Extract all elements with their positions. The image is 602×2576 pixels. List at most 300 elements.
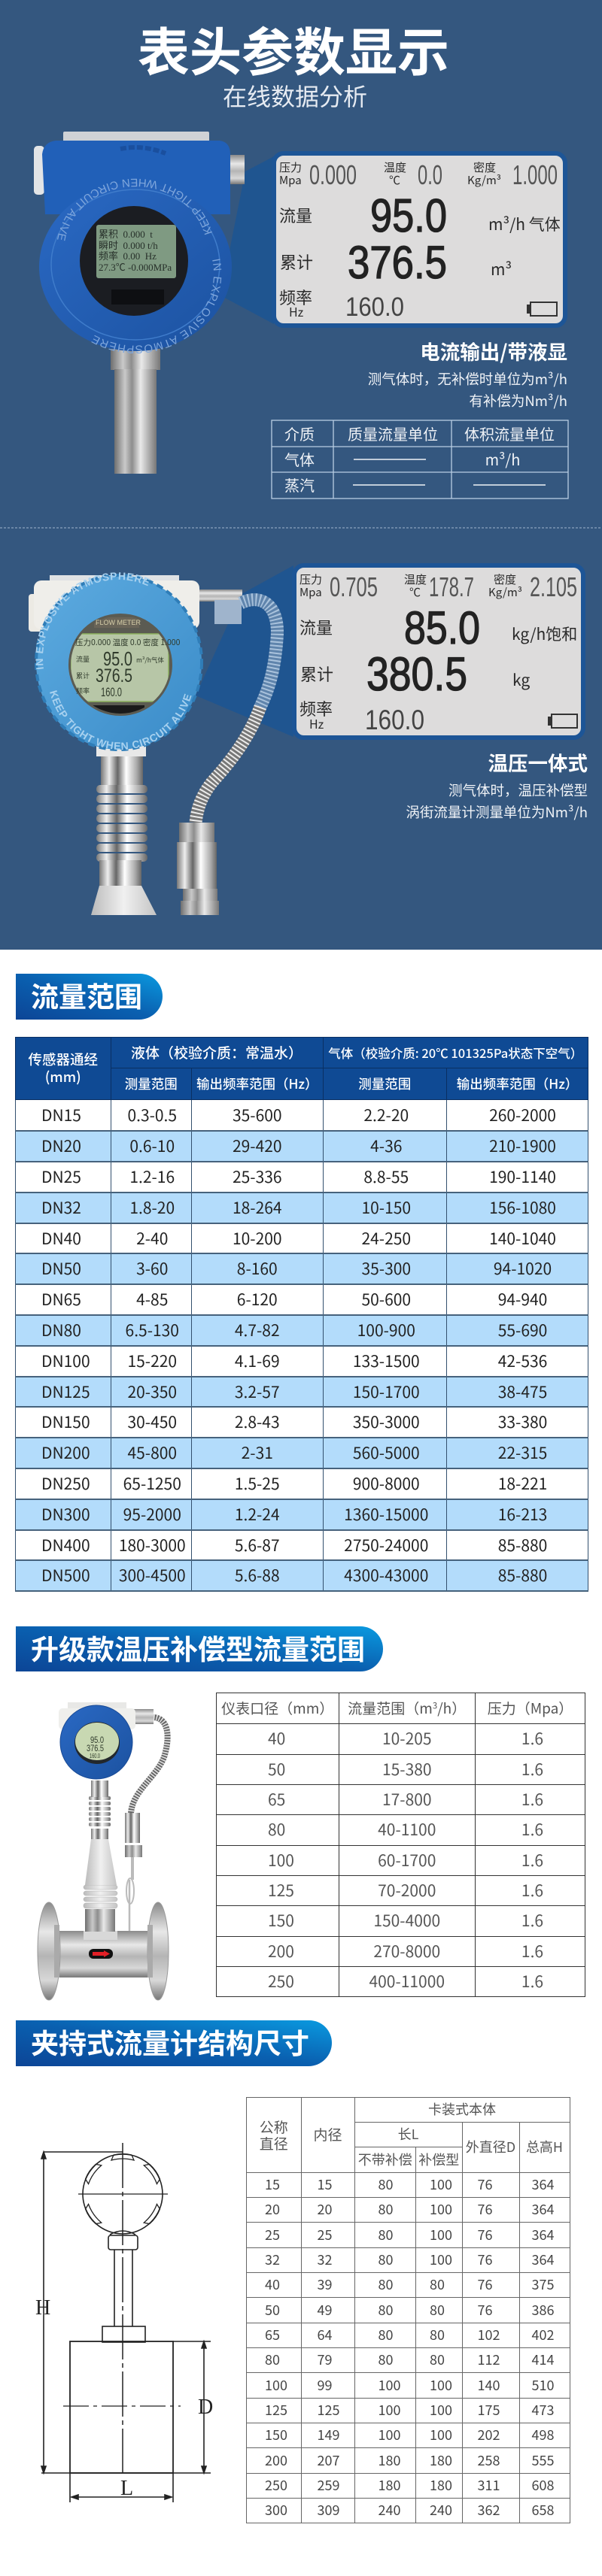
unit table on dark panel: 质量流量单位	[348, 423, 438, 444]
table: clamp-type structure dimensions: 100	[430, 2174, 452, 2194]
table: flow range: 24-250	[361, 1227, 411, 1250]
table: upgraded compensated flow range: 1.6	[521, 1758, 543, 1780]
table: clamp-type structure dimensions: 100	[430, 2225, 452, 2244]
table: clamp-type structure dimensions: 364	[531, 2225, 554, 2244]
table: flow range: 65-1250	[123, 1472, 181, 1495]
table: flow range: 35-300	[361, 1257, 411, 1280]
table: upgraded compensated flow range: 200	[268, 1940, 294, 1962]
table: clamp-type structure dimensions: 100	[430, 2425, 452, 2444]
table: flow range: 94-1020	[494, 1257, 552, 1280]
table: flow range: 2-31	[242, 1441, 273, 1464]
table: clamp-type structure dimensions: 39	[318, 2274, 332, 2294]
table: clamp-type structure dimensions: 80	[430, 2300, 445, 2320]
meter head outline	[83, 2153, 163, 2342]
dimension H: H	[35, 2296, 50, 2320]
unit table on dark panel: 蒸汽	[284, 474, 315, 496]
dimension D: D	[198, 2396, 213, 2419]
table: clamp-type structure dimensions: 49	[318, 2300, 332, 2320]
LCD display 2: 温度	[404, 571, 427, 587]
table: flow range: 85-880	[498, 1534, 547, 1556]
table: flow range: 260-2000	[489, 1104, 556, 1126]
table: clamp-type structure dimensions: 414	[531, 2350, 554, 2369]
table: clamp-type structure dimensions: 32	[318, 2250, 332, 2269]
table: upgraded compensated flow range: 60-1700	[378, 1849, 436, 1871]
illustration: blue transmitter with current output	[34, 132, 245, 474]
LCD display 1: Hz	[289, 302, 304, 320]
subtitle: 在线数据分析	[223, 78, 367, 113]
table: clamp-type structure dimensions: 100	[430, 2199, 452, 2219]
heading: clamp-type structure dimensions: 夹持式流量计结构尺寸	[31, 2021, 309, 2062]
table: upgraded compensated flow range	[216, 1693, 585, 1997]
LCD display 2: 频率	[299, 696, 333, 720]
table: upgraded compensated flow range: 400-11000	[369, 1970, 445, 1993]
table: flow range: 50-600	[361, 1288, 411, 1311]
table: flow range: 350-3000	[353, 1411, 420, 1433]
table: clamp-type structure dimensions: 200	[265, 2450, 287, 2470]
table: flow range: 4300-43000	[344, 1564, 428, 1587]
LCD display 2: kg	[512, 668, 530, 691]
caption: current output with LCD: 电流输出/带液显	[420, 336, 567, 365]
table: flow range: 85-880	[498, 1564, 547, 1587]
table: clamp-type structure dimensions: 50	[265, 2300, 280, 2320]
table: clamp-type structure dimensions: 125	[318, 2400, 339, 2420]
table: clamp-type structure dimensions: 100	[378, 2375, 400, 2395]
table: flow range: 液体（校验介质：常温水）	[131, 1042, 303, 1062]
table: flow range: 45-800	[127, 1441, 177, 1464]
table: flow range: (mm)	[45, 1067, 81, 1086]
table: flow range: 140-1040	[489, 1227, 556, 1250]
table: upgraded compensated flow range: 250	[268, 1970, 294, 1993]
LCD display 1: 0.000	[309, 159, 357, 190]
table: clamp-type structure dimensions: 259	[318, 2475, 339, 2495]
table: flow range: 210-1900	[489, 1135, 556, 1157]
table: flow range: 1.8-20	[129, 1196, 175, 1219]
table: flow range: 1.2-16	[129, 1165, 175, 1188]
table: flow range: 560-5000	[353, 1441, 420, 1464]
table: flow range: 95-2000	[123, 1503, 181, 1526]
table: clamp-type structure dimensions: 100	[430, 2250, 452, 2269]
LCD display 1: 376.5	[348, 237, 447, 288]
table: clamp-type structure dimensions: 内径	[313, 2124, 342, 2144]
table: flow range: 55-690	[498, 1319, 547, 1341]
dimension H	[35, 2152, 211, 2473]
table: clamp-type structure dimensions: 100	[430, 2400, 452, 2420]
table: flow range: 2.8-43	[235, 1411, 280, 1433]
table: clamp-type structure dimensions: 258	[477, 2450, 500, 2470]
table: clamp-type structure dimensions: 公称	[260, 2117, 288, 2137]
table: upgraded compensated flow range: 70-2000	[378, 1879, 436, 1902]
LCD display 1: 1.000	[512, 159, 558, 190]
table: flow range: 156-1080	[489, 1196, 556, 1219]
table: clamp-type structure dimensions: 100	[378, 2425, 400, 2444]
table: clamp-type structure dimensions: 311	[477, 2475, 500, 2495]
table: clamp-type structure dimensions: 180	[430, 2475, 452, 2495]
table: clamp-type structure dimensions: 149	[318, 2425, 339, 2444]
table: upgraded compensated flow range: 1.6	[521, 1788, 543, 1811]
table: flow range: 35-600	[233, 1104, 282, 1126]
table: flow range: 94-940	[498, 1288, 547, 1311]
title: 表头参数显示	[138, 11, 449, 86]
table: clamp-type structure dimensions: 80	[378, 2300, 393, 2320]
illustration: flanged vortex flowmeter	[38, 1702, 169, 2000]
table: flow range: DN200	[41, 1441, 90, 1464]
table: flow range: 900-8000	[353, 1472, 420, 1495]
table: flow range: 38-475	[498, 1380, 547, 1403]
table: flow range: DN20	[41, 1135, 81, 1157]
table: flow range: 4.1-69	[235, 1350, 280, 1372]
table: clamp-type structure dimensions: 100	[265, 2375, 287, 2395]
table: clamp-type structure dimensions: 102	[477, 2325, 500, 2344]
table: clamp-type structure dimensions: 240	[430, 2500, 452, 2520]
table: clamp-type structure dimensions: 76	[477, 2250, 492, 2269]
table: flow range: DN150	[41, 1411, 90, 1433]
illustration: flanged vortex flowmeter: 376.5	[87, 1743, 104, 1753]
table: clamp-type structure dimensions	[246, 2097, 570, 2523]
table: clamp-type structure dimensions: 364	[531, 2174, 554, 2194]
table: upgraded compensated flow range: 100	[268, 1849, 294, 1871]
illustration: temperature-pressure integrated meter: 频率	[76, 686, 90, 696]
LCD display 1: 温度	[384, 159, 406, 175]
table: upgraded compensated flow range: 150-4000	[373, 1909, 440, 1932]
illustration: temperature-pressure integrated meter: FLOW METER	[96, 619, 141, 626]
unit table on dark panel: m³/h	[485, 448, 520, 470]
table: flow range: 4-85	[136, 1288, 168, 1311]
caption text: gas units: 有补偿为Nm³/h	[469, 391, 567, 411]
meter body outline	[70, 2341, 173, 2473]
LCD display 1: 压力	[279, 159, 302, 175]
table: clamp-type structure dimensions: 76	[477, 2274, 492, 2294]
table: upgraded compensated flow range: 40	[268, 1727, 285, 1750]
table: clamp-type structure dimensions: 402	[531, 2325, 554, 2344]
table: upgraded compensated flow range: 65	[268, 1788, 285, 1811]
table: clamp-type structure dimensions: 498	[531, 2425, 554, 2444]
table: upgraded compensated flow range: 1.6	[521, 1727, 543, 1750]
illustration: blue transmitter with current output: 频率 0.00 Hz	[99, 250, 157, 262]
illustration: temperature-pressure integrated meter: 累计	[76, 671, 90, 680]
table: clamp-type structure dimensions: 175	[477, 2400, 500, 2420]
table: flow range: DN100	[41, 1350, 90, 1372]
table: upgraded compensated flow range: 17-800	[382, 1788, 432, 1811]
LCD display 2: ℃	[409, 584, 421, 600]
table: clamp-type structure dimensions: 207	[318, 2450, 339, 2470]
LCD display 1: m³	[491, 258, 512, 280]
LCD display 2: 累计	[300, 662, 333, 686]
table: flow range: 25-336	[233, 1165, 282, 1188]
table: clamp-type structure dimensions: 309	[318, 2500, 339, 2520]
LCD display 2: 压力	[299, 571, 322, 587]
illustration: temperature-pressure integrated meter: 376.5	[96, 665, 132, 686]
illustration: temperature-pressure integrated meter: 95.0	[103, 647, 132, 670]
LCD display 2: 380.5	[366, 648, 467, 701]
table: clamp-type structure dimensions: 15	[318, 2174, 332, 2194]
table: flow range: DN65	[41, 1288, 81, 1311]
table: clamp-type structure dimensions: 64	[318, 2325, 332, 2344]
table: flow range: 150-1700	[353, 1380, 420, 1403]
LCD display 1: 密度	[473, 159, 496, 175]
dimension L: L	[120, 2477, 133, 2500]
table: clamp-type structure dimensions: 40	[265, 2274, 280, 2294]
table: clamp-type structure dimensions: 240	[378, 2500, 400, 2520]
table: flow range: 2.2-20	[363, 1104, 409, 1126]
LCD display 2: 0.705	[330, 571, 378, 602]
table: clamp-type structure dimensions: 76	[477, 2174, 492, 2194]
unit table on dark panel: 气体	[284, 448, 315, 470]
table: clamp-type structure dimensions: 100	[430, 2375, 452, 2395]
table: clamp-type structure dimensions: 80	[378, 2174, 393, 2194]
table: flow range: 190-1140	[489, 1165, 556, 1188]
table: flow range: 0.6-10	[129, 1135, 175, 1157]
LCD display 2: 85.0	[404, 602, 480, 653]
table: upgraded compensated flow range: 流量范围（m3/h）	[348, 1698, 466, 1718]
LCD display 2: kg/h饱和	[512, 623, 577, 645]
LCD display 1: 流量	[279, 203, 312, 227]
table: clamp-type structure dimensions: 362	[477, 2500, 500, 2520]
dimension drawing	[35, 2143, 213, 2502]
table: flow range: 6.5-130	[126, 1319, 179, 1341]
table: flow range: DN15	[41, 1104, 81, 1126]
table: clamp-type structure dimensions: 99	[318, 2375, 332, 2395]
table: clamp-type structure dimensions: 80	[378, 2325, 393, 2344]
callout wedge from meter to display 2	[196, 565, 293, 737]
illustration: blue transmitter with current output: 瞬时 0.000 t/h	[99, 240, 158, 251]
illustration: blue transmitter with current output: IN EXPLOSIVE ATMOSPHERE	[92, 259, 221, 353]
table: clamp-type structure dimensions: 375	[531, 2274, 554, 2294]
table: clamp-type structure dimensions: 180	[430, 2450, 452, 2470]
illustration: blue transmitter with current output: 27.3℃ -0.000MPa	[99, 262, 172, 273]
table: clamp-type structure dimensions: 364	[531, 2199, 554, 2219]
table: upgraded compensated flow range: 40-1100	[378, 1818, 436, 1841]
icon: battery	[528, 302, 557, 316]
table: upgraded compensated flow range: 15-380	[382, 1758, 432, 1780]
LCD display 2: 178.7	[429, 571, 474, 602]
callout wedge from meter to display 1	[220, 156, 274, 324]
table: flow range: 0.3-0.5	[127, 1104, 177, 1126]
table: clamp-type structure dimensions: 80	[378, 2199, 393, 2219]
table: clamp-type structure dimensions: 补偿型	[418, 2150, 459, 2169]
caption text: gas units: 测气体时，无补偿时单位为m³/h	[368, 369, 567, 389]
LCD display 1	[274, 153, 565, 326]
table: upgraded compensated flow range: 仪表口径（mm）	[221, 1698, 333, 1718]
table: flow range: DN32	[41, 1196, 81, 1219]
dimension L	[70, 2473, 173, 2502]
table: flow range: 输出频率范围（Hz）	[457, 1074, 578, 1093]
table: upgraded compensated flow range: 1.6	[521, 1879, 543, 1902]
LCD display 2: Kg/m³	[488, 584, 522, 600]
table: flow range: 传感器通经	[28, 1050, 98, 1069]
table: flow range: 42-536	[498, 1350, 547, 1372]
table: flow range: DN400	[41, 1534, 90, 1556]
illustration: temperature-pressure integrated meter: 流量	[76, 654, 90, 664]
LCD display 1: 160.0	[345, 292, 404, 322]
table: upgraded compensated flow range: 150	[268, 1909, 294, 1932]
table: flow range: 133-1500	[353, 1350, 420, 1372]
LCD display 1: Kg/m³	[467, 172, 501, 188]
illustration: temperature-pressure integrated meter: IN EXPLOSIVE ATMOSPHERE	[35, 572, 150, 669]
table: flow range: 18-264	[233, 1196, 282, 1219]
table: flow range: 5.6-87	[235, 1534, 280, 1556]
table: clamp-type structure dimensions: 80	[430, 2325, 445, 2344]
LCD display 2: 密度	[494, 571, 516, 587]
table: clamp-type structure dimensions: 658	[531, 2500, 554, 2520]
table: clamp-type structure dimensions: 76	[477, 2225, 492, 2244]
LCD display 1: Mpa	[279, 172, 302, 188]
table: clamp-type structure dimensions: 80	[378, 2274, 393, 2294]
table: clamp-type structure dimensions: 364	[531, 2250, 554, 2269]
table: clamp-type structure dimensions: 直径	[260, 2132, 288, 2153]
LCD display 1: 累计	[280, 250, 313, 274]
table: clamp-type structure dimensions: 80	[378, 2250, 393, 2269]
table: clamp-type structure dimensions: 140	[477, 2375, 500, 2395]
table: flow range: 测量范围	[125, 1074, 178, 1093]
LCD display 1: 0.0	[418, 159, 442, 190]
table: clamp-type structure dimensions: 555	[531, 2450, 554, 2470]
table: clamp-type structure dimensions: 20	[318, 2199, 332, 2219]
table: flow range: 1.5-25	[235, 1472, 280, 1495]
caption text: gas units	[368, 369, 567, 411]
table: clamp-type structure dimensions: 80	[265, 2350, 280, 2369]
table: flow range: 2750-24000	[344, 1534, 428, 1556]
table: flow range: 29-420	[233, 1135, 282, 1157]
heading: flow range: 流量范围	[31, 974, 142, 1015]
table: upgraded compensated flow range: 270-8000	[373, 1940, 440, 1962]
table: clamp-type structure dimensions: 15	[265, 2174, 280, 2194]
table: clamp-type structure dimensions: 473	[531, 2400, 554, 2420]
table: upgraded compensated flow range: 1.6	[521, 1849, 543, 1871]
caption text: compensated unit: 测气体时，温压补偿型	[448, 780, 588, 800]
table: flow range: DN250	[41, 1472, 90, 1495]
illustration: temperature-pressure integrated meter: m³/h气体	[136, 656, 164, 665]
table: clamp-type structure dimensions: 不带补偿	[358, 2150, 412, 2169]
LCD display 1: ℃	[389, 172, 400, 188]
table: flow range: 10-200	[233, 1227, 282, 1250]
table: flow range: 1.2-24	[235, 1503, 280, 1526]
table: upgraded compensated flow range: 1.6	[521, 1940, 543, 1962]
table: flow range: DN40	[41, 1227, 81, 1250]
table: clamp-type structure dimensions: 80	[378, 2350, 393, 2369]
table: flow range: DN300	[41, 1503, 90, 1526]
unit table on dark panel: 体积流量单位	[464, 423, 555, 444]
LCD display 2: Hz	[309, 714, 324, 732]
table: clamp-type structure dimensions: 卡装式本体	[428, 2099, 496, 2119]
table: clamp-type structure dimensions: 25	[318, 2225, 332, 2244]
table: clamp-type structure dimensions: 608	[531, 2475, 554, 2495]
LCD display 2: 160.0	[365, 705, 424, 735]
table: flow range: 8-160	[237, 1257, 278, 1280]
table: upgraded compensated flow range: 1.6	[521, 1970, 543, 1993]
table: flow range: 3-60	[136, 1257, 168, 1280]
table: clamp-type structure dimensions: 长L	[398, 2124, 418, 2144]
table: clamp-type structure dimensions: 79	[318, 2350, 332, 2369]
table: flow range: 4-36	[370, 1135, 402, 1157]
table: flow range: 输出频率范围（Hz）	[196, 1074, 318, 1093]
table: flow range: 15-220	[127, 1350, 177, 1372]
icon: battery	[549, 714, 577, 728]
caption text: compensated unit	[406, 780, 588, 822]
table: clamp-type structure dimensions: 180	[378, 2475, 400, 2495]
table: flow range: DN25	[41, 1165, 81, 1188]
table: flow range: 2-40	[136, 1227, 168, 1250]
table: flow range	[15, 1037, 588, 1592]
table: clamp-type structure dimensions: 112	[477, 2350, 500, 2369]
table: clamp-type structure dimensions: 80	[430, 2350, 445, 2369]
table: clamp-type structure dimensions: 202	[477, 2425, 500, 2444]
unit table on dark panel	[272, 420, 568, 499]
table: clamp-type structure dimensions: 510	[531, 2375, 554, 2395]
LCD display 2: 2.105	[530, 571, 577, 602]
LCD display 2: Mpa	[299, 584, 322, 600]
table: flow range: DN125	[41, 1380, 90, 1403]
LCD display 1: m³/h 气体	[488, 213, 561, 235]
table: clamp-type structure dimensions: 80	[430, 2274, 445, 2294]
LCD display 2: 流量	[299, 615, 333, 639]
table: clamp-type structure dimensions: 总高H	[526, 2137, 563, 2156]
table: flow range: 4.7-82	[235, 1319, 280, 1341]
table: flow range: 20-350	[127, 1380, 177, 1403]
table: flow range: 10-150	[361, 1196, 411, 1219]
illustration: blue transmitter with current output: KEEP TIGHT WHEN CIRCUIT ALIVE	[57, 179, 212, 241]
illustration: temperature-pressure integrated meter	[29, 572, 284, 915]
table: clamp-type structure dimensions: 外直径D	[466, 2137, 515, 2156]
table: clamp-type structure dimensions: 76	[477, 2199, 492, 2219]
table: flow range: DN500	[41, 1564, 90, 1587]
table: flow range: 18-221	[498, 1472, 547, 1495]
table: flow range: 1360-15000	[344, 1503, 428, 1526]
table: clamp-type structure dimensions: 100	[378, 2400, 400, 2420]
table: flow range: 33-380	[498, 1411, 547, 1433]
table: flow range: 16-213	[498, 1503, 547, 1526]
table: flow range: 测量范围	[358, 1074, 411, 1093]
table: clamp-type structure dimensions: 20	[265, 2199, 280, 2219]
caption: integrated temperature and pressure: 温压一体式	[488, 747, 588, 777]
table: clamp-type structure dimensions: 300	[265, 2500, 287, 2520]
illustration: flanged vortex flowmeter: 160.0	[90, 1753, 100, 1759]
table: flow range: 180-3000	[119, 1534, 186, 1556]
panel: dark blue display section background	[0, 0, 602, 950]
table: upgraded compensated flow range: 125	[268, 1879, 294, 1902]
table: upgraded compensated flow range: 10-205	[382, 1727, 432, 1750]
table: flow range: 22-315	[498, 1441, 547, 1464]
table: flow range: 8.8-55	[363, 1165, 409, 1188]
table: clamp-type structure dimensions: 125	[265, 2400, 287, 2420]
table: clamp-type structure dimensions: 250	[265, 2475, 287, 2495]
LCD display 1: 频率	[279, 285, 312, 309]
heading: flow range	[16, 974, 163, 1020]
table: flow range: 100-900	[357, 1319, 415, 1341]
table: clamp-type structure dimensions: 80	[378, 2225, 393, 2244]
caption text: compensated unit: 涡街流量计测量单位为Nm³/h	[406, 802, 588, 822]
unit table on dark panel: 介质	[284, 423, 315, 444]
table: clamp-type structure dimensions: 65	[265, 2325, 280, 2344]
table: clamp-type structure dimensions: 150	[265, 2425, 287, 2444]
table: flow range: 300-4500	[119, 1564, 186, 1587]
table: upgraded compensated flow range: 1.6	[521, 1818, 543, 1841]
table: clamp-type structure dimensions: 76	[477, 2300, 492, 2320]
table: clamp-type structure dimensions: 25	[265, 2225, 280, 2244]
table: clamp-type structure dimensions: 180	[378, 2450, 400, 2470]
LCD display 1: 95.0	[370, 190, 447, 242]
illustration: temperature-pressure integrated meter: KEEP TIGHT WHEN CIRCUIT ALIVE	[50, 690, 191, 750]
table: flow range: 6-120	[237, 1288, 278, 1311]
table: upgraded compensated flow range: 50	[268, 1758, 285, 1780]
table: upgraded compensated flow range: 1.6	[521, 1909, 543, 1932]
table: clamp-type structure dimensions: 32	[265, 2250, 280, 2269]
LCD display 2	[294, 565, 583, 738]
table: upgraded compensated flow range: 压力（Mpa）	[488, 1698, 573, 1718]
table: flow range: 3.2-57	[235, 1380, 280, 1403]
illustration: temperature-pressure integrated meter: 压力0.000 温度 0.0 密度 1.000	[75, 637, 181, 648]
table: flow range: DN50	[41, 1257, 81, 1280]
illustration: temperature-pressure integrated meter: 160.0	[101, 685, 122, 699]
